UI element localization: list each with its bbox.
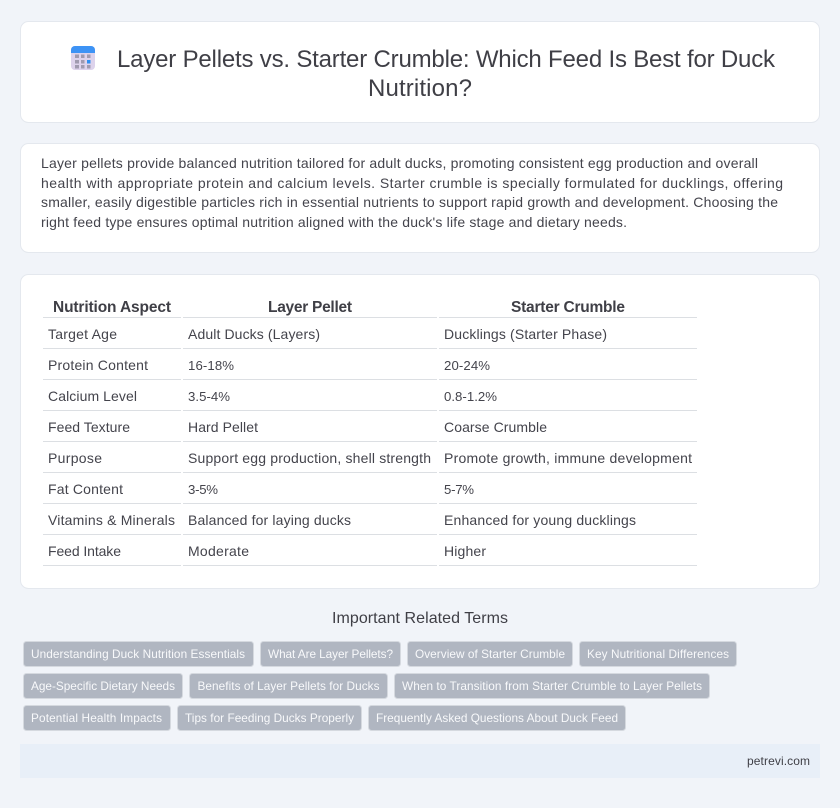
table header: Starter Crumble [511, 299, 625, 316]
text block: intro: right feed type ensures optimal nutrition aligned with the duck's life stage and dietary needs. [41, 214, 627, 230]
table row: protein content: 16-18% [188, 358, 234, 373]
panel: title header [20, 22, 820, 122]
footer [20, 744, 820, 778]
tag list: related terms [24, 642, 736, 730]
footer: petrevi.com [747, 754, 810, 768]
table row: fat content: 3-5% [188, 482, 218, 497]
table row: vitamins and minerals: Vitamins & Minerals [48, 512, 175, 528]
table row: calcium level [48, 388, 497, 404]
icon: calendar [71, 46, 95, 70]
table row: target age [48, 326, 607, 342]
table row: calcium level: 0.8-1.2% [444, 389, 497, 404]
table row: feed texture: Feed Texture [48, 419, 130, 435]
tag [24, 642, 254, 666]
tag: What Are Layer Pellets? [268, 647, 393, 661]
table row: protein content [48, 357, 490, 373]
table row: feed intake [48, 543, 486, 559]
tag: Tips for Feeding Ducks Properly [185, 711, 354, 725]
table row: target age: Target Age [48, 326, 117, 342]
tag: When to Transition from Starter Crumble to Layer Pellets [402, 679, 702, 693]
table header: Nutrition Aspect [53, 299, 171, 316]
table row: fat content: Fat Content [48, 481, 123, 497]
table row: fat content [48, 481, 474, 497]
table header: Layer Pellet [268, 299, 352, 316]
tag [178, 706, 362, 730]
table row: calcium level: Calcium Level [48, 388, 137, 404]
table row: purpose: Support egg production, shell strength [188, 450, 431, 466]
table row: purpose: Purpose [48, 450, 102, 466]
tag [260, 642, 400, 666]
tag [394, 674, 710, 698]
table header [53, 299, 625, 316]
tag: Benefits of Layer Pellets for Ducks [198, 679, 380, 693]
tag [408, 642, 572, 666]
table row: purpose: Promote growth, immune development [444, 450, 692, 466]
table row: protein content: Protein Content [48, 357, 148, 373]
tag [24, 706, 170, 730]
table row: feed intake: Moderate [188, 543, 249, 559]
table row: protein content: 20-24% [444, 358, 490, 373]
tag [190, 674, 388, 698]
table row: feed intake: Higher [444, 543, 486, 559]
tag: Overview of Starter Crumble [415, 647, 565, 661]
tag: Understanding Duck Nutrition Essentials [31, 647, 245, 661]
tag: Potential Health Impacts [31, 711, 162, 725]
tag [24, 674, 182, 698]
title: Nutrition? [368, 75, 472, 102]
table row: purpose [48, 450, 692, 466]
table row: feed intake: Feed Intake [48, 543, 121, 559]
heading: related terms: Important Related Terms [332, 610, 508, 627]
table row: vitamins and minerals: Balanced for laying ducks [188, 512, 351, 528]
table row: feed texture [48, 419, 547, 435]
text block: intro: Layer pellets provide balanced nutrition tailored for adult ducks, promoting consistent egg production and overall [41, 155, 758, 171]
table row: feed texture: Coarse Crumble [444, 419, 547, 435]
title: Layer Pellets vs. Starter Crumble: Which Feed Is Best for Duck [117, 46, 776, 73]
panel: comparison table [20, 274, 820, 588]
tag: Key Nutritional Differences [587, 647, 729, 661]
table row: fat content: 5-7% [444, 482, 474, 497]
text block: intro: smaller, easily digestible particles rich in essential nutrients to support rapid growth and development. Choosing the [41, 194, 778, 210]
tag [580, 642, 736, 666]
text block: intro: health with appropriate protein and calcium levels. Starter crumble is specially formulated for ducklings, offering [41, 175, 783, 191]
table row: target age: Ducklings (Starter Phase) [444, 326, 607, 342]
table row: vitamins and minerals: Enhanced for young ducklings [444, 512, 636, 528]
tag: Age-Specific Dietary Needs [31, 679, 175, 693]
tag [368, 706, 626, 730]
table row: target age: Adult Ducks (Layers) [188, 326, 320, 342]
table row: calcium level: 3.5-4% [188, 389, 230, 404]
tag: Frequently Asked Questions About Duck Feed [376, 711, 618, 725]
panel: intro paragraph [20, 144, 820, 252]
table row: vitamins and minerals [48, 512, 636, 528]
table row: feed texture: Hard Pellet [188, 419, 258, 435]
